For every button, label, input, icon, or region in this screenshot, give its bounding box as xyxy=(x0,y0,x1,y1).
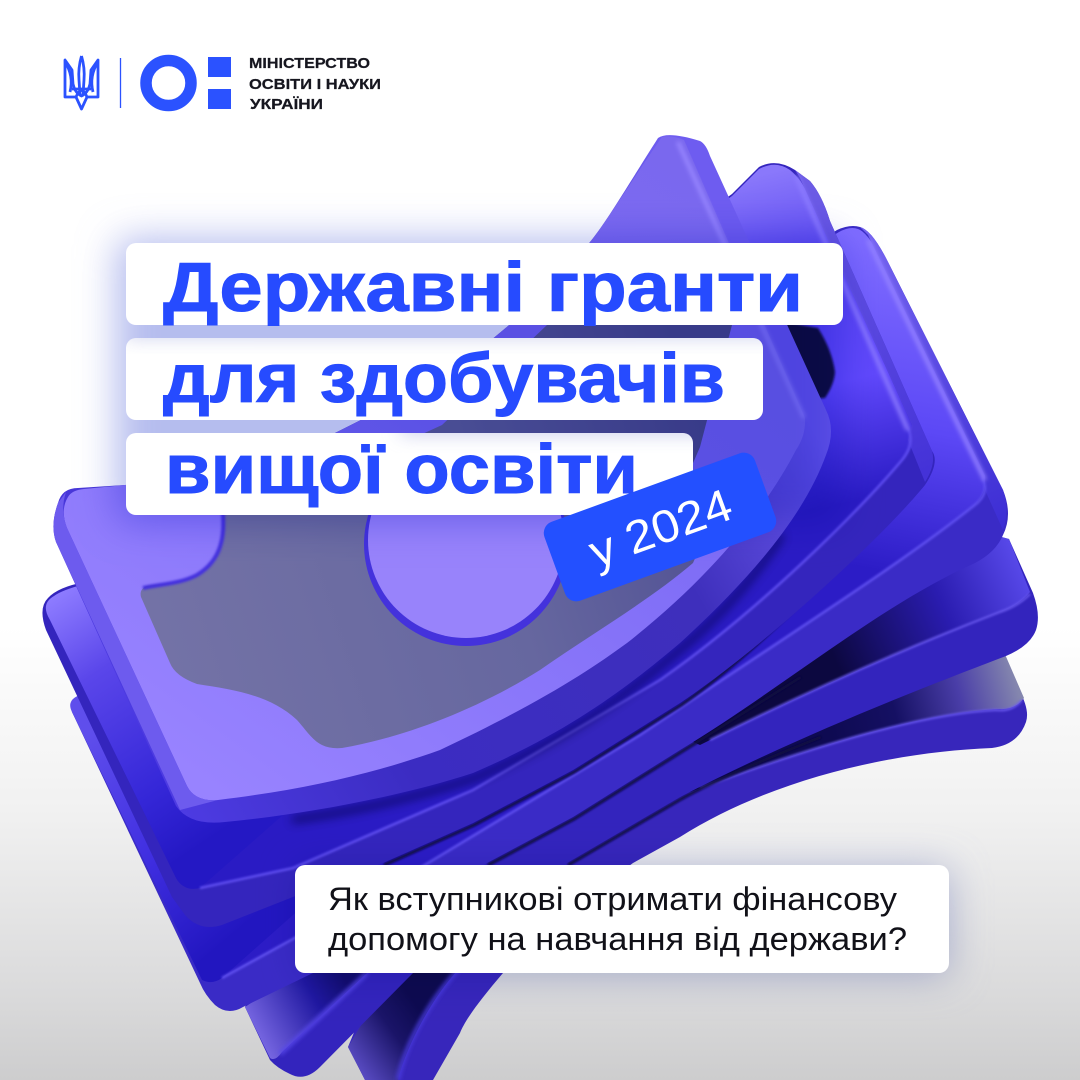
title line 3: вищої освіти xyxy=(165,430,638,508)
lower edge shadow xyxy=(568,737,821,865)
callout text xyxy=(328,881,907,957)
right bevel xyxy=(860,227,1006,530)
banknote 5 (bottom) xyxy=(348,620,1027,1080)
banknote 3 xyxy=(70,226,1008,1011)
banknote 1 (top) xyxy=(53,135,831,823)
callout: question xyxy=(295,865,950,976)
title halo xyxy=(116,238,841,523)
title line 1: Державні гранти xyxy=(163,248,803,326)
raised circle xyxy=(364,442,568,646)
shadow cast by line 2 xyxy=(396,433,692,443)
ridge highlight xyxy=(678,142,804,418)
banknote 4 xyxy=(245,480,1038,1077)
squares xyxy=(208,57,231,77)
badge: year: у 2024 xyxy=(582,478,739,578)
banknote window xyxy=(141,325,732,748)
title line 2: для здобувачів xyxy=(163,339,725,417)
ring xyxy=(146,60,191,106)
note face xyxy=(64,136,805,800)
ministry name: ОСВІТИ І НАУКИ xyxy=(249,76,381,93)
callout text: допомогу на навчання від держави? xyxy=(328,921,907,957)
lower edge shadow xyxy=(384,602,801,865)
badge: year xyxy=(540,449,780,605)
left bevel xyxy=(53,492,218,810)
shadow of top note xyxy=(292,535,782,820)
callout box xyxy=(295,865,949,973)
shadow cast by line 1 xyxy=(128,338,762,346)
ministry name: МІНІСТЕРСТВО xyxy=(249,55,370,72)
title block xyxy=(116,238,843,523)
lower edge shadow xyxy=(488,677,801,865)
banknote 2 xyxy=(42,163,935,927)
ministry name xyxy=(249,55,381,113)
right bevel xyxy=(795,170,933,482)
callout shadow xyxy=(300,868,950,976)
divider xyxy=(120,58,122,108)
dark gap behind top note xyxy=(785,322,835,400)
logo: Ministry of Education and Science of Ukraine xyxy=(65,55,381,113)
note edge xyxy=(53,135,831,823)
ministry name: УКРАЇНИ xyxy=(250,96,323,113)
callout text: Як вступникові отримати фінансову xyxy=(328,881,897,917)
window blob rim xyxy=(143,505,223,588)
icon: trident xyxy=(65,56,98,109)
